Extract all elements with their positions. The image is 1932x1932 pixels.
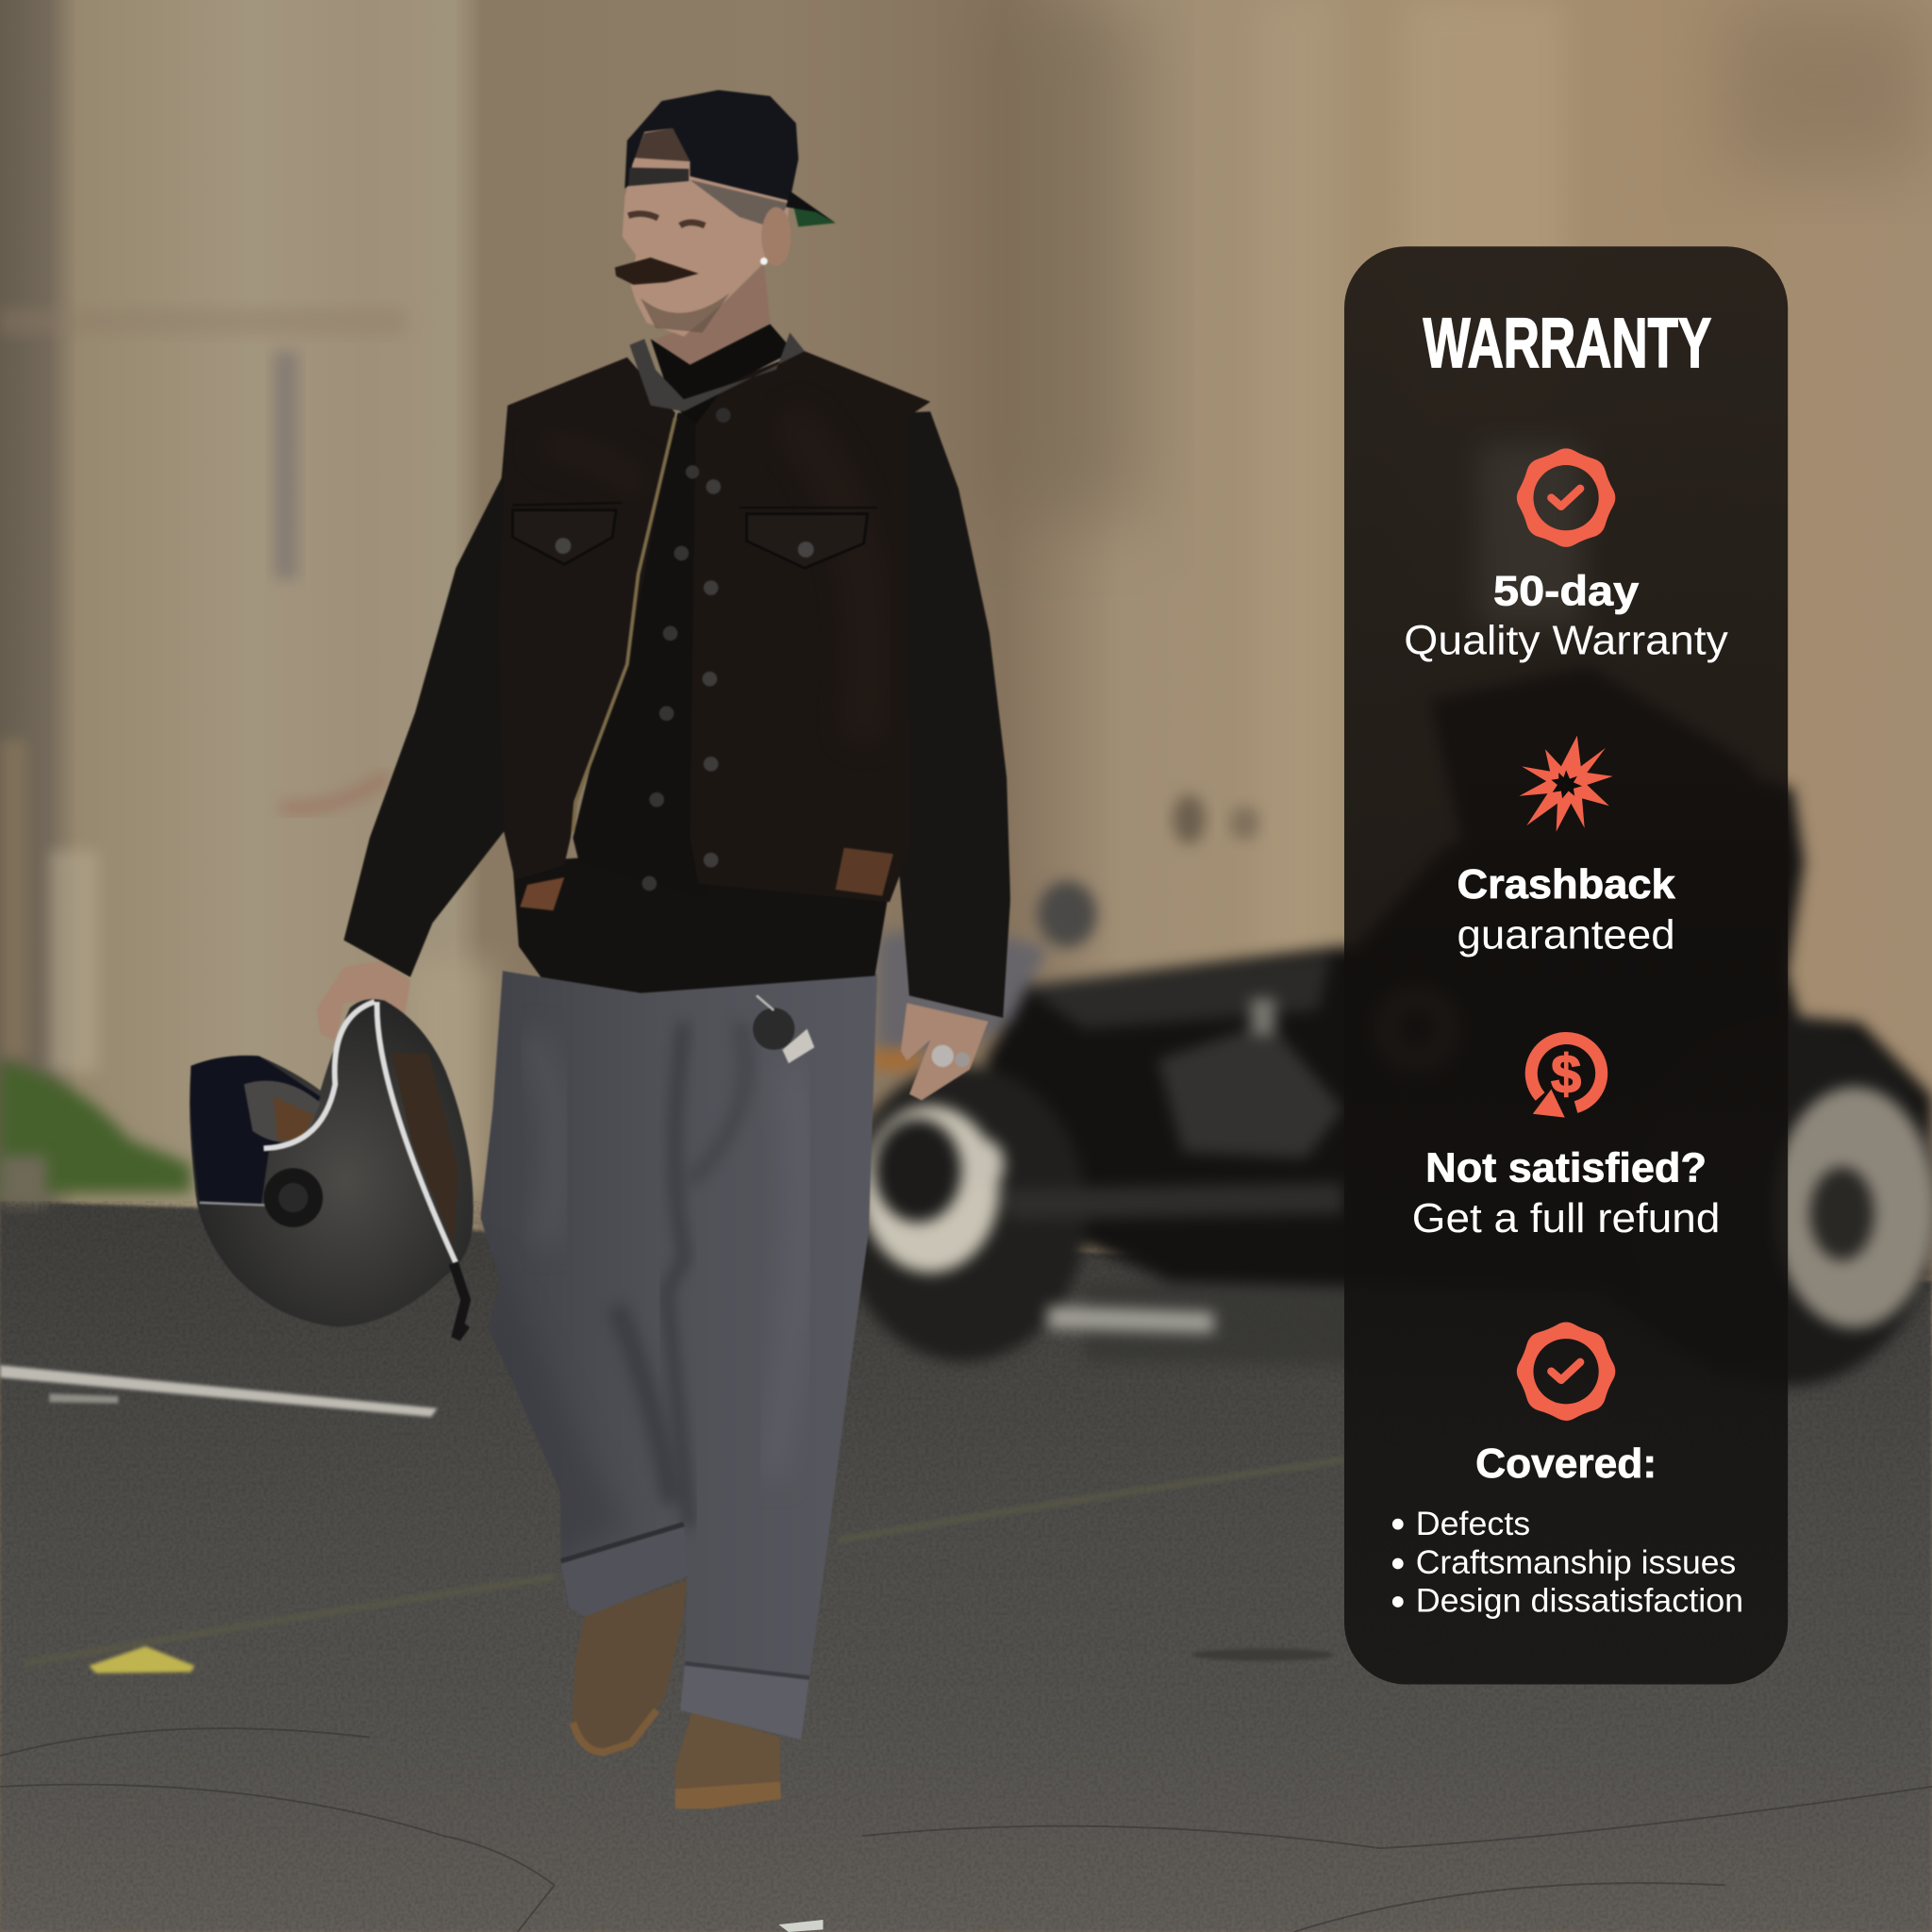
panel: warranty card xyxy=(1344,246,1788,1684)
text: Crashback guaranteed xyxy=(1457,862,1676,958)
helmet xyxy=(190,999,474,1338)
text: Crashback guaranteed: guaranteed xyxy=(1457,913,1675,958)
list: covered items: Defects xyxy=(1416,1506,1530,1542)
text: 50-day Quality Warranty: 50-day xyxy=(1493,568,1639,614)
text: Crashback guaranteed: Crashback xyxy=(1457,862,1676,908)
man: head with cap and moustache xyxy=(615,90,836,424)
list: covered items xyxy=(1392,1506,1743,1619)
icon: refund arrow with dollar: $ xyxy=(1551,1044,1581,1105)
man: hands and keys xyxy=(317,961,989,1100)
icon: crash burst xyxy=(1519,736,1613,832)
list: covered items: Design dissatisfaction xyxy=(1416,1582,1743,1619)
blurred motorcycle xyxy=(841,665,1932,1386)
icon: covered badge with check xyxy=(1517,1322,1615,1421)
man: jacket xyxy=(343,351,1010,1018)
man: boots xyxy=(572,1581,781,1808)
text: 50-day Quality Warranty: Quality Warranty xyxy=(1404,619,1728,664)
text: Not satisfied? Get a full refund: Get a full refund xyxy=(1412,1196,1720,1241)
text: Covered heading: Covered: xyxy=(1475,1441,1657,1487)
heading: WARRANTY: WARRANTY xyxy=(1424,304,1711,382)
icon: quality badge with check xyxy=(1517,448,1615,547)
text: Not satisfied? Get a full refund xyxy=(1412,1146,1720,1241)
man xyxy=(190,90,1010,1808)
man: trousers xyxy=(480,971,877,1740)
concrete wall xyxy=(0,0,1932,1356)
text: 50-day Quality Warranty xyxy=(1404,568,1728,664)
icon: refund arrow with dollar xyxy=(1531,1038,1602,1118)
text: Not satisfied? Get a full refund: Not satisfied? xyxy=(1425,1146,1707,1191)
list: covered items: Craftsmanship issues xyxy=(1416,1544,1736,1581)
green bush xyxy=(0,1062,191,1192)
asphalt ground xyxy=(0,1156,1932,1932)
